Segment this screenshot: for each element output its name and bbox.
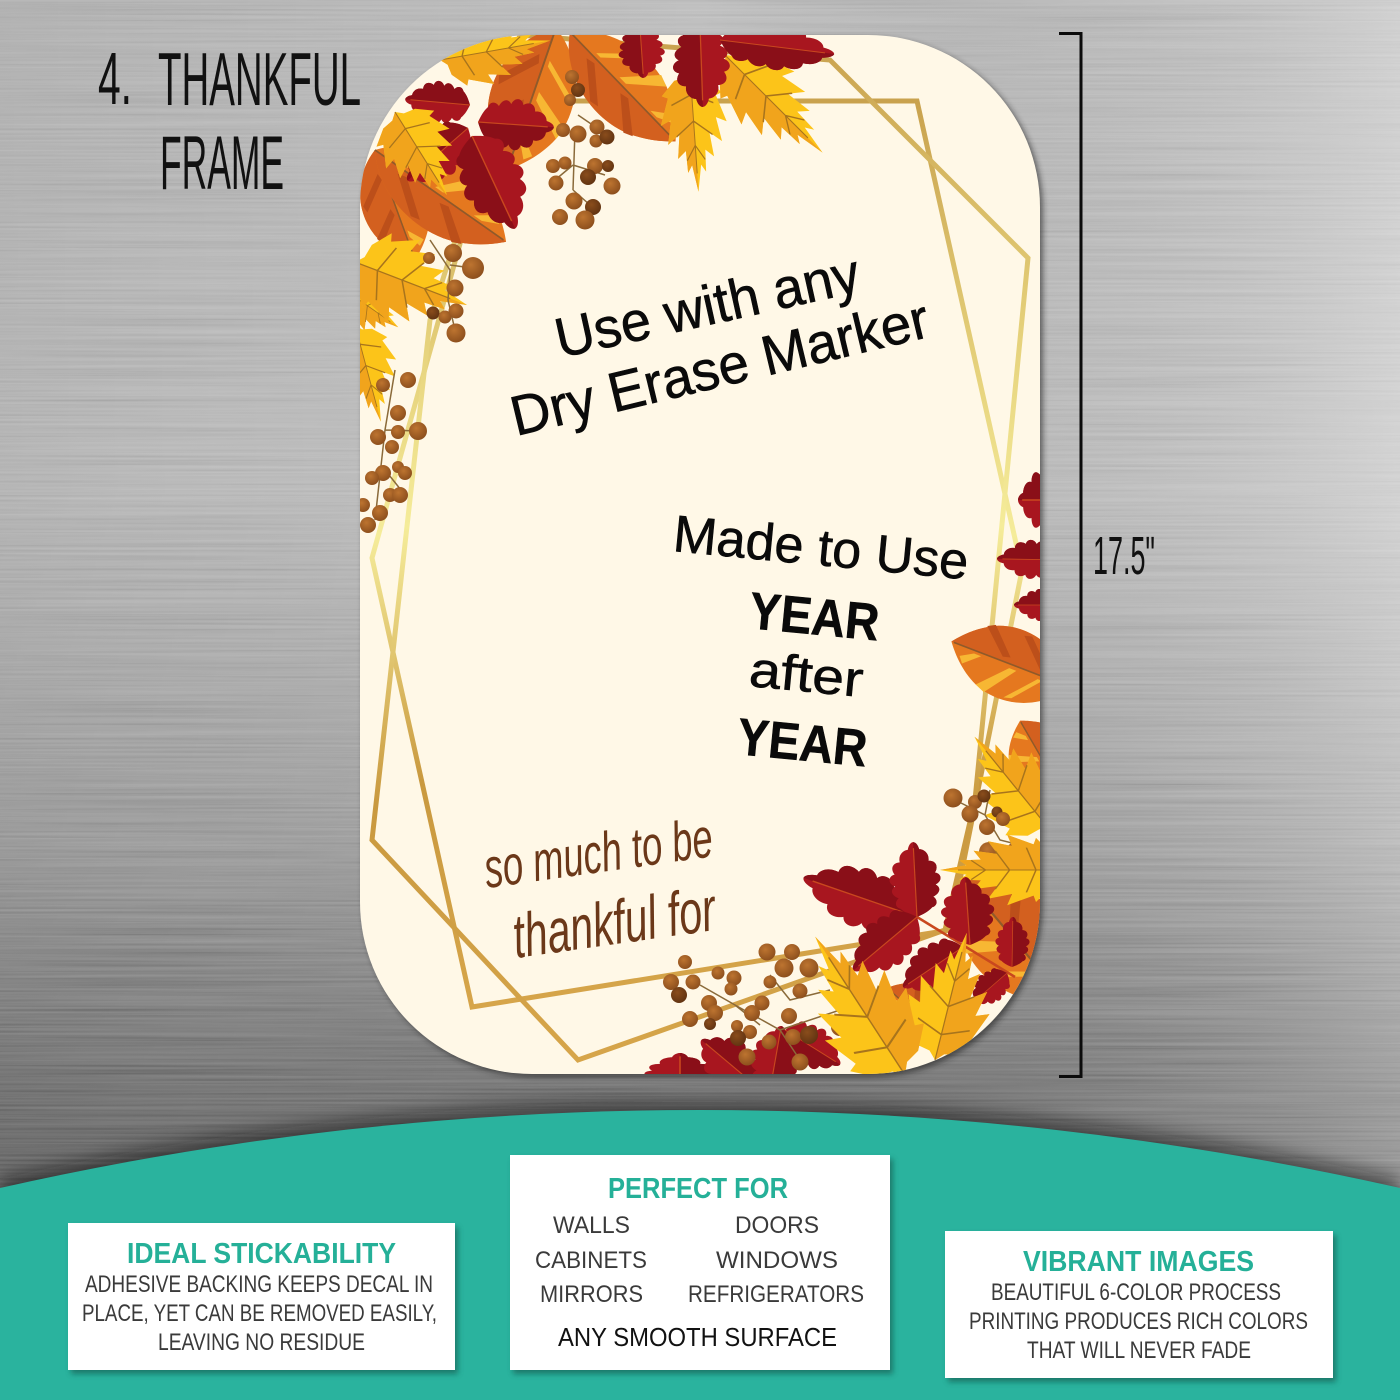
title: 4. Thankful Frame: 4. bbox=[98, 37, 132, 120]
berries: bottom bbox=[663, 944, 858, 1070]
panel: perfect for: PERFECT FOR bbox=[608, 1173, 788, 1205]
teal curved footer band bbox=[0, 1101, 1400, 1400]
text: use with any dry erase marker: Dry Erase Marker bbox=[504, 286, 935, 448]
title: 4. Thankful Frame: THANKFUL bbox=[158, 37, 361, 121]
panel: perfect for: MIRRORS bbox=[540, 1281, 643, 1308]
text: made to use year after year: Made to Use bbox=[671, 505, 971, 591]
berries: top bbox=[546, 70, 620, 230]
panel: dry erase magnet board bbox=[359, 34, 1047, 1080]
panel: ideal stickability bbox=[68, 1223, 458, 1374]
panel: perfect for: DOORS bbox=[735, 1212, 819, 1239]
text: made to use year after year: YEAR bbox=[747, 582, 882, 652]
text: so much to be thankful for bbox=[480, 805, 722, 972]
text: 17.5" bbox=[1093, 526, 1155, 586]
text: use with any dry erase marker: Use with any bbox=[549, 241, 865, 370]
panel: ideal stickability: ADHESIVE BACKING KEEPS DECAL IN bbox=[85, 1271, 433, 1298]
panel: ideal stickability: LEAVING NO RESIDUE bbox=[158, 1329, 365, 1356]
text: made to use year after year: YEAR bbox=[735, 708, 870, 778]
panel: perfect for: WINDOWS bbox=[716, 1247, 838, 1274]
leaf cluster: right edge bbox=[952, 472, 1040, 836]
leaf cluster: bottom edge bbox=[644, 1021, 840, 1074]
leaf cluster: top left bbox=[360, 35, 676, 422]
panel: perfect for: WALLS bbox=[553, 1212, 630, 1239]
panel: ideal stickability: IDEAL STICKABILITY bbox=[127, 1238, 396, 1270]
title: 4. Thankful Frame bbox=[98, 37, 361, 206]
panel: ideal stickability: PLACE, YET CAN BE REMOVED EASILY, bbox=[82, 1300, 437, 1327]
berries: left bbox=[356, 240, 484, 533]
panel: vibrant images: THAT WILL NEVER FADE bbox=[1027, 1337, 1251, 1364]
panel: vibrant images bbox=[945, 1231, 1336, 1382]
text: made to use year after year: after bbox=[747, 641, 866, 708]
panel: perfect for: ANY SMOOTH SURFACE bbox=[558, 1322, 837, 1352]
panel: perfect for: REFRIGERATORS bbox=[688, 1281, 864, 1308]
leaf cluster: top centre bbox=[618, 35, 834, 192]
text: so much to be thankful for: so much to be bbox=[480, 805, 716, 900]
panel: vibrant images: BEAUTIFUL 6-COLOR PROCESS bbox=[991, 1279, 1281, 1306]
big yellow maple leaf: bottom bbox=[815, 936, 924, 1074]
panel: perfect for: CABINETS bbox=[535, 1247, 647, 1274]
title: 4. Thankful Frame: FRAME bbox=[160, 121, 284, 206]
text: made to use year after year bbox=[671, 505, 971, 778]
berries: lower right bbox=[944, 788, 1012, 854]
panel: vibrant images: PRINTING PRODUCES RICH COLORS bbox=[969, 1308, 1308, 1335]
gold geometric frames bbox=[372, 35, 1028, 1060]
panel: vibrant images: VIBRANT IMAGES bbox=[1023, 1246, 1254, 1278]
text: so much to be thankful for: thankful for bbox=[508, 875, 722, 972]
panel: perfect for bbox=[510, 1155, 893, 1374]
dimension bracket: 17.5 inches bbox=[1059, 34, 1155, 1076]
leaf cluster: bottom right bbox=[803, 835, 1040, 1060]
